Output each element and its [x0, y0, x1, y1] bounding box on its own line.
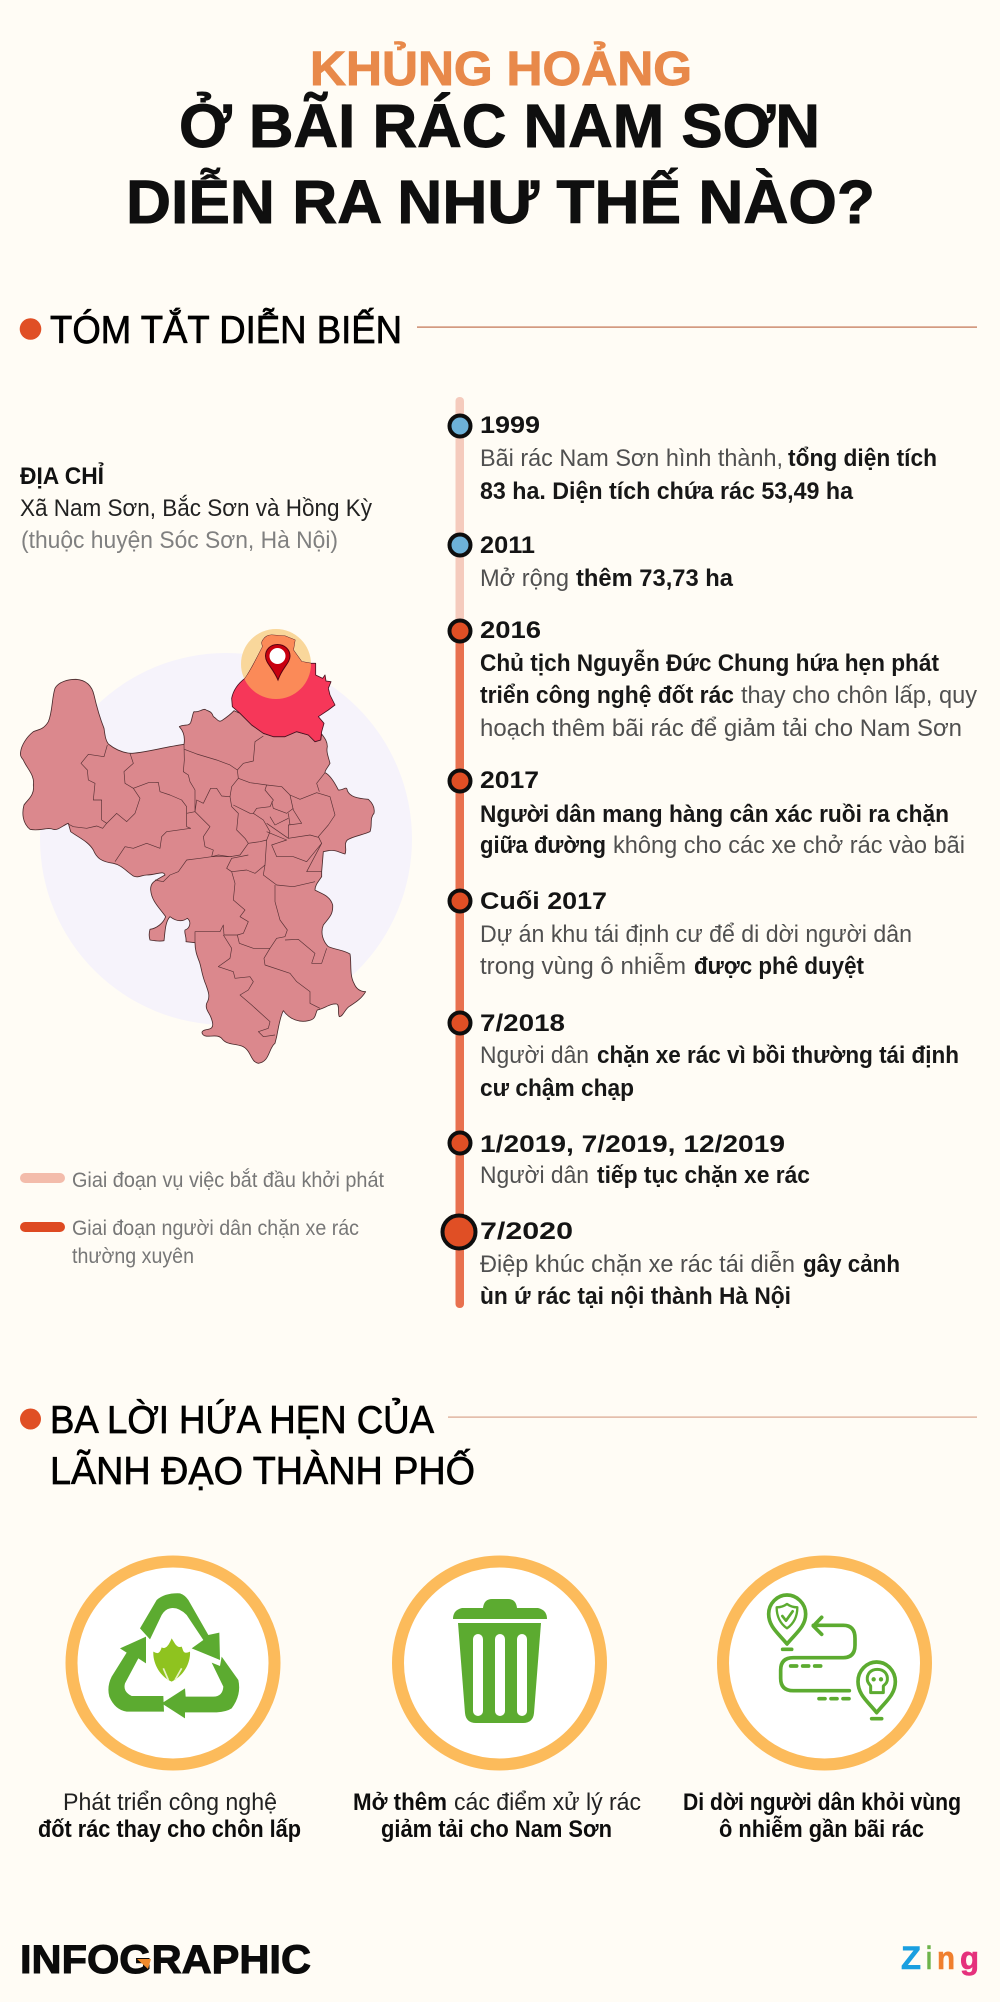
timeline event: 1999: 1999 — [480, 412, 540, 439]
caption — [353, 1789, 641, 1843]
timeline event: late 2017: được phê duyệt — [694, 953, 864, 980]
section heading: three promises — [20, 1398, 977, 1493]
footer logo: Zing: i — [926, 1940, 932, 1976]
timeline event: 2016: triển công nghệ đốt rác — [480, 682, 734, 709]
address text block: Xã Nam Sơn, Bắc Sơn và Hồng Kỳ — [20, 495, 372, 522]
promise 1: recycling — [38, 1562, 301, 1843]
timeline event: 2011: Mở rộng — [480, 565, 569, 592]
timeline event: late 2017: Dự án khu tái định cư để di dời người dân — [480, 921, 912, 948]
caption: giảm tải cho Nam Sơn — [381, 1816, 612, 1843]
footer logo: Zing: g — [960, 1940, 979, 1976]
title: DIỄN RA NHƯ THẾ NÀO? — [126, 168, 875, 236]
timeline event: 2017: 2017 — [480, 767, 539, 794]
caption: ô nhiễm gần bãi rác — [719, 1815, 924, 1843]
timeline event: 2019: 1/2019, 7/2019, 12/2019 — [480, 1131, 785, 1158]
icon: recycling arrows with leaf — [108, 1593, 239, 1718]
timeline event: 2016: hoạch thêm bãi rác để giảm tải cho Nam Sơn — [480, 715, 962, 742]
timeline event: 7/2018: cư chậm chạp — [480, 1075, 634, 1102]
timeline event: 7/2018: Người dân — [480, 1042, 589, 1069]
footer logo: Zing: Z — [901, 1940, 921, 1976]
highlighted district: Soc Son — [232, 635, 335, 742]
timeline event: 1999: 83 ha. Diện tích chứa rác 53,49 ha — [480, 478, 853, 505]
section heading: summary of events — [20, 308, 977, 352]
icon: trash can — [453, 1599, 547, 1723]
timeline event: 2017: không cho các xe chở rác vào bãi — [613, 832, 965, 859]
timeline event: 7/2018: 7/2018 — [480, 1010, 565, 1037]
footer logo: Zing — [901, 1940, 979, 1976]
promise 2: trash bin — [353, 1562, 641, 1843]
timeline event: 1999 — [450, 412, 937, 505]
address text block: ĐỊA CHỈ — [20, 461, 104, 490]
caption: Di dời người dân khỏi vùng — [683, 1789, 961, 1816]
timeline event: 7/2020: gây cảnh — [803, 1251, 900, 1278]
timeline event: 2019: Người dân — [480, 1162, 589, 1189]
timeline event: 2017: giữa đường — [480, 832, 606, 859]
promise 3: relocation — [683, 1562, 961, 1843]
timeline event: 1999: tổng diện tích — [788, 445, 937, 472]
timeline event: late 2017 — [450, 888, 912, 980]
title: Ở BÃI RÁC NAM SƠN — [179, 92, 820, 160]
footer logo: Zing: n — [937, 1940, 955, 1976]
legend — [20, 1169, 384, 1268]
section heading: three promises: BA LỜI HỨA HẸN CỦA — [50, 1398, 434, 1442]
timeline event: 2016: thay cho chôn lấp, quy — [741, 682, 978, 709]
icon: route between two map pins — [769, 1595, 895, 1719]
timeline event: 2011: thêm 73,73 ha — [576, 565, 733, 592]
legend: Giai đoạn người dân chặn xe rác — [72, 1217, 359, 1240]
map of Hanoi with Soc Son highlighted — [20, 629, 412, 1063]
timeline event: 2019 — [450, 1131, 810, 1189]
timeline event: 7/2020: ùn ứ rác tại nội thành Hà Nội — [480, 1283, 791, 1310]
address text block — [20, 461, 372, 554]
timeline event: 2016 — [450, 617, 978, 742]
timeline event: late 2017: Cuối 2017 — [480, 888, 607, 915]
legend: Giai đoạn vụ việc bắt đầu khởi phát — [72, 1169, 384, 1192]
legend: thường xuyên — [72, 1245, 194, 1268]
section heading: three promises: LÃNH ĐẠO THÀNH PHỐ — [50, 1448, 475, 1493]
caption: các điểm xử lý rác — [454, 1789, 641, 1816]
section heading: summary of events: TÓM TẮT DIỄN BIẾN — [50, 308, 402, 352]
timeline event: 2019: tiếp tục chặn xe rác — [597, 1162, 810, 1189]
timeline event: 7/2018: chặn xe rác vì bồi thường tái định — [597, 1042, 959, 1069]
timeline event: 2017 — [450, 767, 965, 859]
caption — [683, 1789, 961, 1843]
timeline event: 2016: Chủ tịch Nguyễn Đức Chung hứa hẹn phát — [480, 649, 939, 677]
timeline event: 7/2020: 7/2020 — [480, 1218, 573, 1245]
timeline event: late 2017: trong vùng ô nhiễm — [480, 953, 686, 980]
timeline event: 7/2018 — [450, 1010, 959, 1102]
address text block: (thuộc huyện Sóc Sơn, Hà Nội) — [21, 527, 338, 554]
timeline event: 2017: Người dân mang hàng cân xác ruồi ra chặn — [480, 801, 949, 828]
timeline event: 2011 — [450, 532, 733, 592]
icon: location pin — [266, 644, 290, 680]
caption: Mở thêm — [353, 1789, 447, 1816]
caption: đốt rác thay cho chôn lấp — [38, 1816, 301, 1843]
caption: Phát triển công nghệ — [63, 1789, 277, 1816]
timeline event: 2016: 2016 — [480, 617, 541, 644]
caption — [38, 1789, 301, 1843]
footer logo: INFOGRAPHIC: INFOGRAPHIC — [20, 1938, 311, 1982]
timeline line — [456, 397, 464, 1308]
timeline event: 7/2020 — [442, 1216, 900, 1310]
timeline event: 2011: 2011 — [480, 532, 535, 559]
title — [126, 41, 875, 236]
timeline event: 7/2020: Điệp khúc chặn xe rác tái diễn — [480, 1251, 795, 1278]
title: KHỦNG HOẢNG — [310, 41, 692, 96]
timeline event: 1999: Bãi rác Nam Sơn hình thành, — [480, 445, 783, 472]
